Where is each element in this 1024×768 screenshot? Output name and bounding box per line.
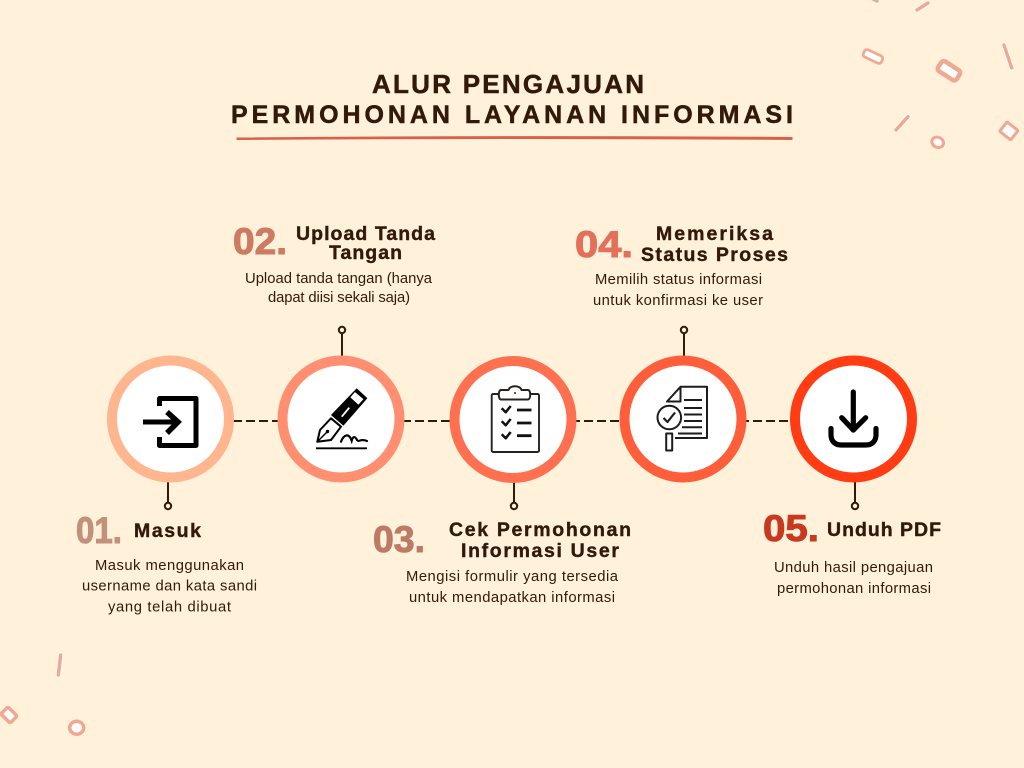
step 1 text: Masuk — [134, 520, 201, 542]
step 5 circle — [795, 360, 912, 478]
step 4 text: Memilih status informasi — [595, 272, 762, 288]
step 3 text: 03. — [373, 519, 425, 560]
step 4 text: untuk konfirmasi ke user — [593, 293, 763, 309]
step 1 text — [76, 510, 257, 616]
step 2 text: Tangan — [329, 242, 402, 264]
step 5 text: Unduh PDF — [827, 519, 941, 541]
step 5 text — [763, 508, 941, 597]
step stems and pins — [165, 327, 858, 509]
step 3 circle — [454, 361, 572, 478]
icon: document with magnifier — [658, 387, 707, 450]
step 3 text: untuk mendapatkan informasi — [409, 590, 615, 606]
step 2 text: dapat diisi sekali saja) — [268, 290, 410, 306]
step 4 text: Memeriksa — [656, 223, 773, 245]
title — [231, 69, 793, 129]
step 3 text: Cek Permohonan — [449, 519, 631, 541]
icon: fountain pen signature — [316, 389, 367, 448]
step 4 text — [575, 223, 788, 309]
title: PERMOHONAN LAYANAN INFORMASI — [231, 101, 793, 129]
dashed connector line — [233, 420, 790, 422]
step 4 text: 04. — [575, 224, 633, 265]
step 1 circle — [112, 360, 229, 478]
step 2 text: Upload tanda tangan (hanya — [245, 271, 433, 287]
decorative confetti: top right — [862, 0, 1018, 149]
icon: download — [831, 392, 876, 445]
step 3 text: Informasi User — [461, 540, 619, 562]
step 5 text: permohonan informasi — [777, 581, 931, 597]
icon: clipboard checklist — [492, 386, 539, 452]
step 2 text — [233, 221, 435, 306]
icon: sign in — [143, 398, 196, 446]
step 2 text: 02. — [233, 221, 287, 262]
step 5 text: Unduh hasil pengajuan — [774, 560, 933, 576]
step 1 text: Masuk menggunakan — [95, 558, 244, 574]
step 3 text — [373, 519, 631, 606]
step 1 text: username dan kata sandi — [82, 578, 257, 594]
step 4 text: Status Proses — [641, 244, 788, 266]
step 2 text: Upload Tanda — [296, 223, 435, 245]
step 1 text: 01. — [76, 510, 122, 551]
step 5 text: 05. — [763, 508, 819, 549]
title underline — [237, 137, 792, 140]
decorative confetti: bottom left — [1, 655, 84, 734]
title: ALUR PENGAJUAN — [372, 69, 644, 99]
step 3 text: Mengisi formulir yang tersedia — [406, 569, 619, 585]
step 2 circle — [282, 360, 400, 478]
step 4 circle — [624, 360, 742, 478]
step 1 text: yang telah dibuat — [108, 600, 231, 616]
